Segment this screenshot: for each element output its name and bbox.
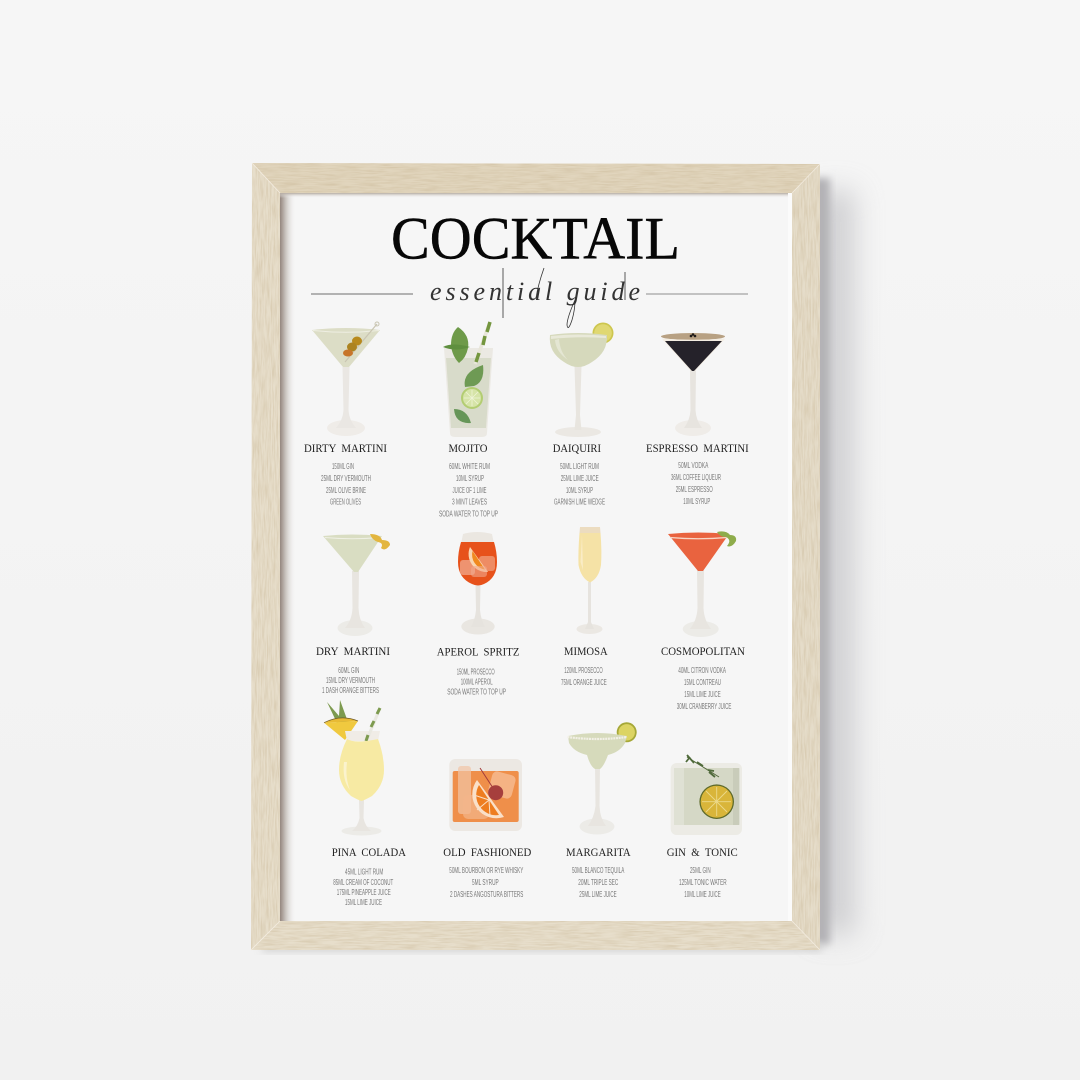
panel: gin and tonic (667, 755, 742, 899)
ingredients (561, 665, 607, 687)
ingredients (671, 460, 721, 506)
ingredients: 15ML CONTREAU (684, 677, 721, 687)
ingredients (554, 461, 605, 506)
ingredients (321, 461, 371, 506)
ingredients: 85ML CREAM OF COCONUT (333, 877, 394, 887)
ingredients (447, 666, 506, 696)
ingredients: 5ML SYRUP (472, 877, 499, 887)
ingredients: 15ML DRY VERMOUTH (326, 675, 375, 685)
ingredients: 25ML OLIVE BRINE (326, 485, 366, 495)
name: ESPRESSO MARTINI (646, 443, 749, 455)
name: MOJITO (448, 443, 488, 455)
ingredients: 1 DASH ORANGE BITTERS (322, 685, 379, 695)
ingredients: 2 DASHES ANGOSTURA BITTERS (450, 889, 523, 899)
ingredients: 25ML ESPRESSO (676, 484, 713, 494)
icon: gin and tonic glass (671, 755, 742, 835)
icon: old fashioned glass (449, 759, 522, 831)
name: DAIQUIRI (553, 443, 601, 455)
icon: cosmopolitan glass (668, 531, 736, 637)
ingredients: 175ML PINEAPPLE JUICE (337, 887, 391, 897)
name: DRY MARTINI (316, 646, 390, 658)
icon: espresso martini glass (661, 333, 725, 436)
ingredients: GREEN OLIVES (330, 496, 361, 506)
ingredients: 25ML LIME JUICE (579, 889, 617, 899)
panel: dry martini (316, 534, 390, 695)
title: COCKTAIL (391, 206, 680, 272)
icon: aperol spritz glass (458, 532, 497, 634)
ingredients: 50ML LIGHT RUM (560, 461, 599, 471)
ingredients: JUICE OF 1 LIME (452, 485, 487, 495)
ingredients: 125ML TONIC WATER (679, 877, 727, 887)
panel: espresso martini (646, 333, 749, 506)
panel: cosmopolitan (661, 531, 746, 711)
panel: pina colada (324, 700, 407, 907)
ingredients: 15ML LIME JUICE (684, 689, 721, 699)
ingredients: 150ML PROSECCO (457, 666, 495, 676)
ingredients: 25ML LIME JUICE (561, 473, 599, 483)
poster sheet (280, 193, 792, 921)
ingredients: 40ML CITRON VODKA (678, 665, 726, 675)
ingredients (322, 665, 379, 695)
name: OLD FASHIONED (443, 847, 531, 859)
ingredients (572, 865, 624, 899)
name: COSMOPOLITAN (661, 646, 746, 658)
icon: margarita glass (568, 722, 637, 834)
ingredients (449, 865, 523, 899)
icon: dirty martini glass (312, 322, 380, 436)
ingredients: GARNISH LIME WEDGE (554, 496, 605, 506)
ingredients (333, 866, 394, 907)
panel: mimosa (561, 527, 608, 687)
ingredients: 150ML GIN (332, 461, 354, 471)
ingredients: 100ML APEROL (461, 676, 493, 686)
ingredients: SODA WATER TO TOP UP (447, 686, 506, 696)
panel: mojito (439, 322, 498, 518)
panel: daiquiri (550, 322, 614, 506)
framed poster mockup scene (251, 163, 866, 955)
ingredients: 50ML BOURBON OR RYE WHISKY (449, 865, 523, 875)
name: GIN & TONIC (667, 847, 738, 859)
icon: mojito glass (443, 322, 493, 437)
ingredients: 120ML PROSECCO (564, 665, 603, 675)
ingredients: 10ML SYRUP (683, 496, 710, 506)
subtitle with rules: essential guide (430, 277, 640, 306)
icon: pina colada glass (324, 700, 384, 836)
ingredients: 10ML LIME JUICE (684, 889, 721, 899)
panel: dirty martini (304, 322, 387, 506)
icon: daiquiri glass (550, 322, 614, 437)
ingredients: 10ML SYRUP (566, 485, 593, 495)
wooden frame (250, 160, 822, 952)
ingredients: 15ML LIME JUICE (345, 897, 382, 907)
name: MIMOSA (564, 646, 608, 658)
ingredients: 3 MINT LEAVES (452, 496, 487, 506)
icon: dry martini glass (323, 534, 390, 636)
ingredients: 60ML GIN (338, 665, 359, 675)
ingredients: 10ML SYRUP (456, 473, 484, 483)
icon: mimosa glass (576, 527, 602, 634)
ingredients: 36ML COFFEE LIQUEUR (671, 472, 721, 482)
panel: aperol spritz (437, 532, 519, 696)
ingredients: 30ML CRANBERRY JUICE (677, 701, 732, 711)
ingredients: 25ML DRY VERMOUTH (321, 473, 371, 483)
subtitle with rules (311, 268, 748, 328)
panel: margarita (566, 722, 637, 899)
name: MARGARITA (566, 847, 631, 859)
ingredients: 60ML WHITE RUM (449, 461, 490, 471)
name: APEROL SPRITZ (437, 646, 519, 658)
ingredients (679, 865, 727, 899)
ingredients: 25ML GIN (690, 865, 711, 875)
ingredients: 50ML VODKA (678, 460, 708, 470)
name: PINA COLADA (332, 847, 407, 859)
panel: old fashioned (443, 759, 531, 899)
ingredients: 50ML BLANCO TEQUILA (572, 865, 624, 875)
frame shadow (262, 178, 855, 952)
ingredients: 75ML ORANGE JUICE (561, 677, 607, 687)
ingredients: 20ML TRIPLE SEC (578, 877, 618, 887)
ingredients: SODA WATER TO TOP UP (439, 508, 498, 518)
name: DIRTY MARTINI (304, 443, 387, 455)
ingredients (439, 461, 498, 518)
ingredients: 45ML LIGHT RUM (345, 866, 383, 876)
ingredients (677, 665, 732, 711)
